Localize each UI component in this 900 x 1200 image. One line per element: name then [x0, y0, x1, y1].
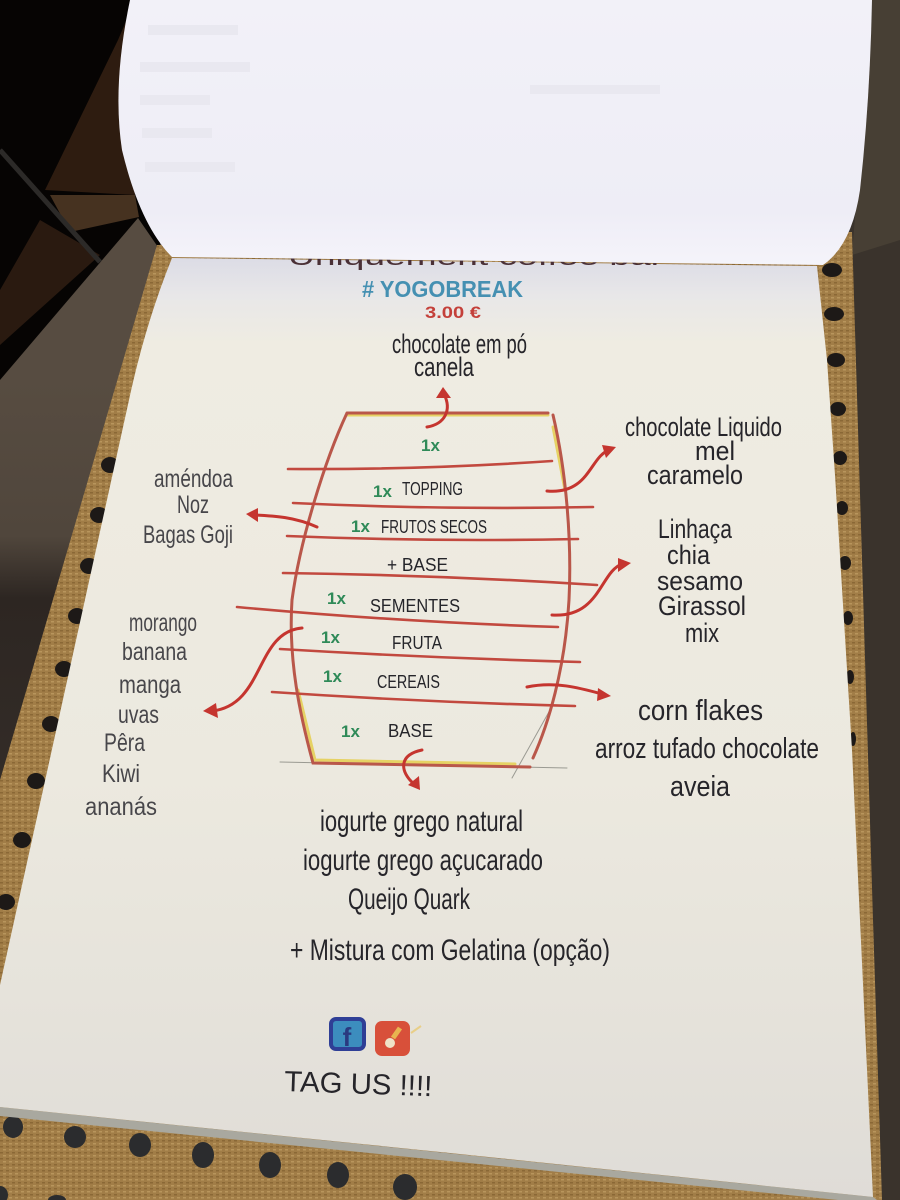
text: sauces: caramelo	[647, 460, 743, 490]
text: nuts: Bagas Goji	[143, 521, 233, 549]
text: cereals: aveia	[670, 771, 731, 803]
text: top toppings: canela	[414, 352, 475, 382]
notepad page	[0, 258, 873, 1197]
price: 3.00 €	[425, 303, 482, 322]
text: bases: iogurte grego açucarado	[303, 844, 543, 877]
text: bases: + Mistura com Gelatina (opção)	[290, 934, 610, 967]
notepad stack edge	[0, 1107, 877, 1200]
text: fruits: Pêra	[104, 729, 145, 757]
icon: facebook: f	[343, 1022, 352, 1052]
text: seeds: sesamo	[657, 566, 743, 596]
pencil guide lines	[280, 710, 567, 778]
layer labels: + BASE	[387, 555, 448, 575]
text: seeds: chia	[667, 540, 711, 570]
layer labels	[321, 436, 487, 741]
text: seeds: Linhaça	[658, 514, 733, 544]
text: seeds: mix	[685, 618, 719, 648]
layer labels: BASE	[388, 721, 433, 741]
title: # YOGOBREAK	[362, 276, 523, 302]
text: sauces: chocolate Liquido	[625, 412, 782, 442]
layer lines	[237, 461, 597, 706]
tag us text: TAG US !!!!	[284, 1066, 433, 1103]
arrows	[203, 387, 631, 790]
text: cereals	[595, 695, 819, 803]
text: seeds	[657, 514, 746, 648]
layer labels: 1x	[327, 589, 346, 608]
layer labels: 1x	[341, 722, 360, 741]
cut-off heading line: Uniquement coffee bar	[288, 244, 663, 271]
text: bases	[290, 805, 610, 967]
text: sauces	[625, 412, 782, 490]
layer labels: TOPPING	[402, 479, 463, 499]
layer labels: 1x	[323, 667, 342, 686]
layer labels: 1x	[321, 628, 340, 647]
text: bases: iogurte grego natural	[320, 805, 523, 838]
text: nuts	[143, 465, 233, 549]
icon: facebook	[331, 1019, 364, 1052]
layer labels: 1x	[421, 436, 440, 455]
text: fruits: uvas	[118, 701, 159, 729]
text: fruits: banana	[122, 638, 187, 666]
text: nuts: Noz	[177, 491, 209, 519]
diagram: yogurt cup with layers	[237, 413, 597, 778]
layer labels: 1x	[351, 517, 370, 536]
cork board with holes	[0, 232, 882, 1200]
cup outline	[291, 413, 570, 767]
layer labels: CEREAIS	[377, 672, 440, 692]
icon: instagram	[375, 1021, 421, 1056]
text: bases: Queijo Quark	[348, 883, 471, 916]
layer labels: FRUTOS SECOS	[381, 517, 487, 537]
layer labels: SEMENTES	[370, 596, 460, 616]
layer labels: FRUTA	[392, 633, 442, 653]
curled page over the top	[118, 0, 872, 265]
text: fruits: manga	[119, 671, 181, 699]
text: top toppings	[392, 329, 527, 382]
text: nuts: améndoa	[154, 465, 233, 493]
text: fruits: Kiwi	[102, 760, 140, 788]
layer labels: 1x	[373, 482, 392, 501]
cup yellow highlights	[298, 415, 565, 764]
text: fruits	[85, 609, 197, 821]
text: fruits: morango	[129, 609, 197, 637]
text: cereals: arroz tufado chocolate	[595, 733, 819, 765]
text: seeds: Girassol	[658, 591, 746, 621]
text: cereals: corn flakes	[638, 695, 763, 727]
text: top toppings: chocolate em pó	[392, 329, 527, 359]
text: fruits: ananás	[85, 793, 157, 821]
text: sauces: mel	[695, 436, 735, 466]
